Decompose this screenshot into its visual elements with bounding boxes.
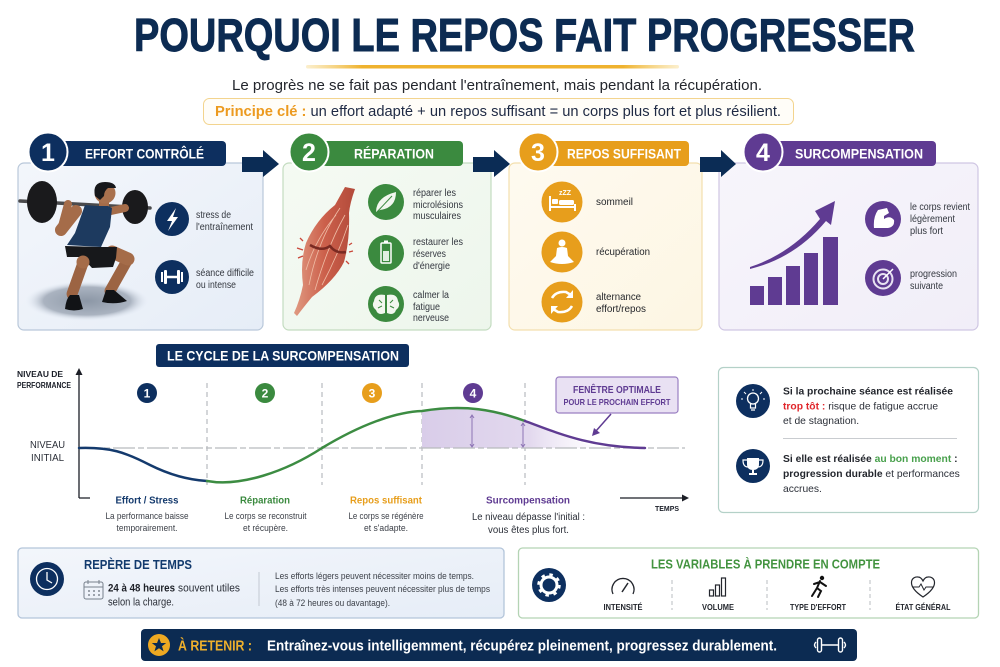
panel: step 3 repos suffisant bbox=[509, 132, 702, 330]
y axis label: PERFORMANCE bbox=[17, 381, 72, 390]
icon: trophy bbox=[736, 449, 770, 483]
text: 24 to 48 hours: selon la charge. bbox=[108, 596, 174, 608]
time axis: TEMPS bbox=[655, 504, 679, 513]
heading: LES VARIABLES À PRENDRE EN COMPTE bbox=[651, 556, 880, 572]
phase dividers bbox=[207, 383, 525, 485]
step 2 header bbox=[290, 132, 463, 172]
icon: dumbbell bbox=[814, 638, 846, 652]
text: calmer: fatigue bbox=[413, 302, 440, 313]
phase text 3: Le corps se régénère bbox=[348, 511, 424, 521]
arrow 1 to 2 bbox=[242, 150, 279, 177]
phase badge 1 bbox=[137, 383, 157, 403]
arrow 2 to 3 bbox=[473, 150, 510, 177]
divider bbox=[258, 572, 260, 606]
step 3 header: REPOS SUFFISANT bbox=[567, 146, 681, 162]
performance curve bbox=[79, 408, 645, 482]
text: right moment: accrues. bbox=[783, 484, 822, 495]
step 3 header: 3 bbox=[531, 139, 545, 167]
phase badge 3 bbox=[362, 383, 382, 403]
variable: intensité bbox=[604, 578, 643, 612]
step 4 header bbox=[744, 132, 936, 172]
baseline bbox=[79, 447, 685, 449]
callout: fenêtre optimale: POUR LE PROCHAIN EFFORT bbox=[564, 397, 670, 407]
text: too early: risque de fatigue accrue bbox=[825, 402, 938, 412]
optimal zone shading bbox=[422, 408, 600, 448]
phase text 1: temporairement. bbox=[116, 523, 178, 533]
text: restaurer: d'énergie bbox=[413, 261, 450, 272]
key principle callout bbox=[204, 98, 794, 124]
chart heading bbox=[156, 344, 409, 367]
phase text 1: Effort / Stress bbox=[116, 494, 179, 506]
variable: volume bbox=[702, 578, 734, 612]
axes bbox=[79, 372, 90, 498]
step 1 header bbox=[28, 132, 226, 172]
icon: gear bbox=[532, 568, 566, 602]
text: récupération: récupération bbox=[596, 247, 650, 258]
divider bbox=[783, 438, 957, 440]
chart heading: LE CYCLE DE LA SURCOMPENSATION bbox=[167, 348, 399, 364]
variable: état général: ÉTAT GÉNÉRAL bbox=[896, 602, 950, 612]
step 3 header bbox=[518, 132, 689, 172]
phase badge 4 bbox=[463, 383, 483, 403]
text: réparer: musculaires bbox=[413, 211, 461, 222]
phase text 2: Réparation bbox=[240, 494, 290, 506]
chart: surcompensation cycle bbox=[17, 344, 689, 536]
panel: step 2 réparation bbox=[283, 132, 491, 330]
message: Entraînez-vous intelligemment, récupérez pleinement, progressez durablement. bbox=[267, 638, 777, 654]
phase badge 2 bbox=[255, 383, 275, 403]
text: calmer: nerveuse bbox=[413, 313, 449, 324]
title underline bbox=[306, 65, 679, 68]
text: right moment: et performances bbox=[883, 469, 960, 480]
text: séance: ou intense bbox=[196, 280, 236, 291]
variable: type d'effort: TYPE D'EFFORT bbox=[790, 602, 846, 612]
step 1 header: EFFORT CONTRÔLÉ bbox=[85, 144, 204, 162]
icon: clock bbox=[30, 562, 64, 596]
text: corps plus fort: le corps revient bbox=[910, 202, 970, 213]
panel: timing consequences bbox=[718, 368, 978, 512]
text: effort durations: (48 à 72 heures ou davantage). bbox=[275, 598, 390, 609]
icon: brain bbox=[368, 286, 404, 322]
icon: cycle arrows bbox=[542, 282, 582, 322]
phase badge 3: 3 bbox=[369, 386, 376, 400]
arrow 3 to 4 bbox=[700, 150, 736, 177]
step 4 header: SURCOMPENSATION bbox=[795, 146, 923, 162]
text: séance: séance difficile bbox=[196, 268, 254, 279]
panel: step 1 effort contrôlé bbox=[18, 132, 263, 330]
panel: variables à prendre en compte bbox=[518, 548, 978, 618]
phase text 4: vous êtes plus fort. bbox=[488, 525, 569, 536]
phase text 3: et s'adapte. bbox=[364, 523, 408, 533]
icon: light bulb bbox=[736, 384, 770, 418]
icon: battery bbox=[368, 235, 404, 271]
text: right moment: progression durable bbox=[783, 469, 883, 480]
icon: lightning bolt bbox=[155, 202, 189, 236]
text: too early: et de stagnation. bbox=[783, 416, 859, 427]
text: restaurer: réserves bbox=[413, 249, 446, 260]
text: too early: trop tôt : bbox=[783, 402, 825, 412]
heading: REPÈRE DE TEMPS bbox=[84, 557, 192, 572]
y axis label: NIVEAU DE bbox=[17, 370, 64, 379]
phase text 4: Le niveau dépasse l'initial : bbox=[472, 512, 585, 523]
text: réparer: réparer les bbox=[413, 188, 456, 199]
callout: fenêtre optimale: FENÊTRE OPTIMALE bbox=[573, 383, 661, 396]
phase text 4: Surcompensation bbox=[486, 494, 570, 506]
text: corps plus fort: légèrement bbox=[910, 214, 955, 225]
step 1 header: 1 bbox=[41, 139, 55, 167]
phase text 3: Repos suffisant bbox=[350, 494, 422, 506]
phase badge 1: 1 bbox=[144, 386, 151, 400]
time axis bbox=[620, 494, 689, 513]
text: alternance: alternance bbox=[596, 292, 641, 303]
chart: rising bars with arrow bbox=[750, 201, 838, 305]
icon: dumbbell bbox=[155, 260, 189, 294]
step 4 header: 4 bbox=[756, 139, 770, 167]
text: progression: suivante bbox=[910, 281, 943, 292]
text: right moment: Si elle est réalisée bbox=[783, 454, 875, 465]
text: réparer: microlésions bbox=[413, 200, 463, 211]
callout: fenêtre optimale bbox=[556, 377, 678, 436]
text: progression: progression bbox=[910, 269, 957, 280]
text: effort durations: Les efforts légers peuvent nécessiter moins de temps. bbox=[275, 571, 474, 582]
panel: repère de temps bbox=[18, 548, 504, 618]
phase badge 4: 4 bbox=[470, 386, 477, 400]
gain arrows bbox=[470, 415, 525, 447]
initial level label: INITIAL bbox=[31, 452, 64, 464]
key principle callout: Principe clé : un effort adapté + un repos suffisant = un corps plus fort et plus résilient. bbox=[215, 103, 781, 120]
text: right moment: au bon moment : bbox=[875, 454, 958, 465]
text: too early: Si la prochaine séance est réalisée bbox=[783, 386, 953, 398]
variable: intensité: INTENSITÉ bbox=[604, 602, 643, 612]
variable: état général bbox=[896, 577, 950, 612]
text: 24 to 48 hours: 24 à 48 heures bbox=[108, 582, 175, 594]
icon: bed: zZZ bbox=[559, 190, 572, 197]
step 2 header: RÉPARATION bbox=[354, 146, 434, 162]
variable: type d'effort bbox=[790, 576, 846, 612]
icon: target bbox=[865, 260, 901, 296]
panel: step 4 surcompensation bbox=[719, 132, 978, 330]
icon: star bbox=[148, 634, 170, 656]
text: alternance: effort/repos bbox=[596, 304, 646, 315]
icon: bed bbox=[542, 182, 582, 222]
icon: muscle fibre bbox=[368, 184, 404, 220]
illustration: athlete squatting with barbell bbox=[20, 181, 150, 321]
text: calmer: calmer la bbox=[413, 290, 449, 301]
variable: volume: VOLUME bbox=[702, 602, 734, 612]
phase text 2: Le corps se reconstruit bbox=[224, 511, 307, 521]
step 2 header: 2 bbox=[302, 139, 316, 167]
icon: calendar bbox=[84, 580, 103, 599]
banner: à retenir bbox=[141, 629, 857, 661]
phase badge 2: 2 bbox=[262, 386, 269, 400]
text: stress: stress de bbox=[196, 210, 231, 221]
text: restaurer: restaurer les bbox=[413, 237, 463, 248]
text: sommeil: sommeil bbox=[596, 197, 633, 208]
text: effort durations: Les efforts très intenses peuvent nécessiter plus de temps bbox=[275, 584, 490, 595]
text: corps plus fort: plus fort bbox=[910, 226, 943, 237]
label: À RETENIR : bbox=[178, 638, 252, 654]
icon: meditation bbox=[542, 232, 582, 272]
illustration: torn muscle bbox=[294, 187, 355, 316]
icon: flexed arm bbox=[865, 201, 901, 237]
initial level label: NIVEAU bbox=[30, 439, 65, 451]
text: stress: l'entraînement bbox=[196, 222, 253, 233]
phase text 2: et récupère. bbox=[243, 523, 288, 533]
text: 24 to 48 hours: souvent utiles bbox=[178, 582, 240, 594]
phase text 1: La performance baisse bbox=[106, 511, 188, 521]
subtitle: Le progrès ne se fait pas pendant l'entraînement, mais pendant la récupération. bbox=[232, 77, 762, 94]
